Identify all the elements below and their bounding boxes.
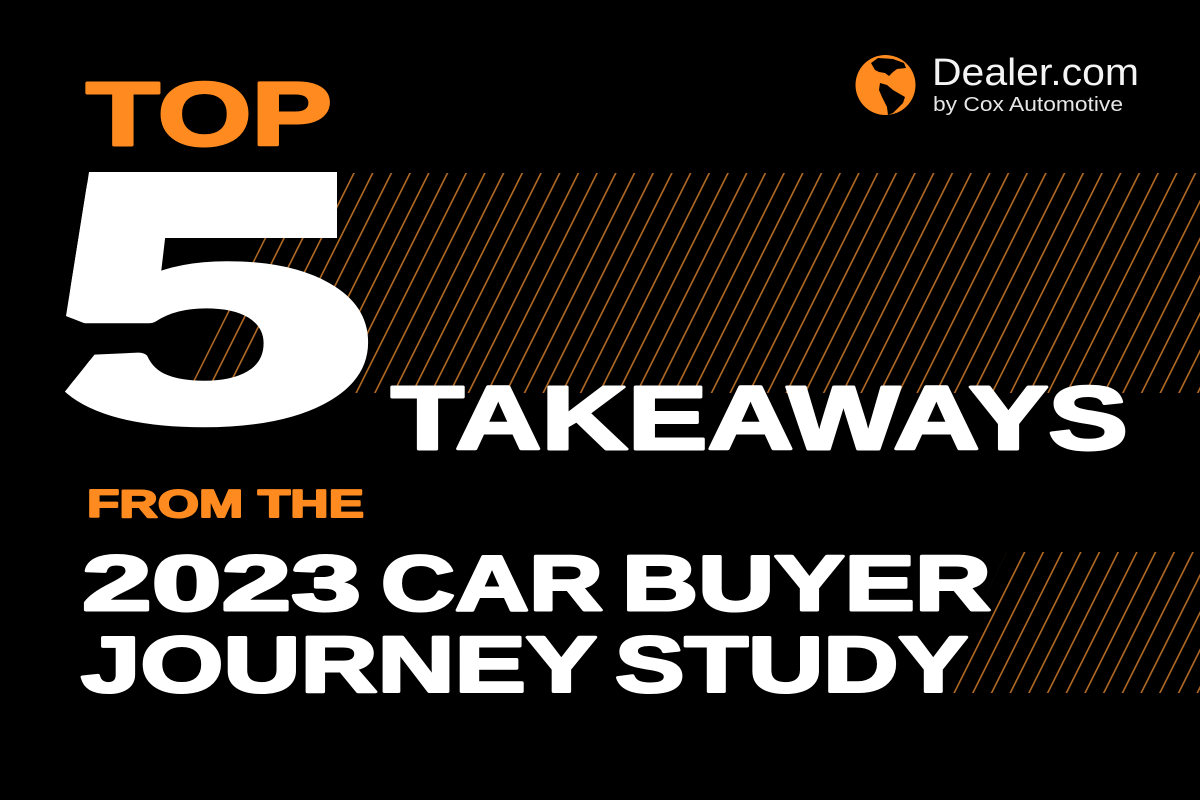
tagline: by Cox Automotive: by Cox Automotive bbox=[933, 93, 1123, 116]
title line: JOURNEY STUDY bbox=[81, 620, 968, 708]
title line: 2023 CAR BUYER: CAR bbox=[381, 539, 603, 627]
subheading: FROM THE: FROM THE bbox=[87, 483, 364, 526]
title line: 2023 CAR BUYER bbox=[82, 539, 991, 627]
heading: TOP: TOP bbox=[86, 65, 332, 165]
title line: 2023 CAR BUYER: 2023 bbox=[82, 539, 361, 627]
numeral: 5: 5 bbox=[36, 116, 376, 490]
hatched band: lower bbox=[937, 552, 1200, 693]
logo: Dealer.com by Cox Automotive bbox=[856, 52, 1139, 116]
title line: JOURNEY STUDY: JOURNEY bbox=[81, 620, 597, 708]
numeral: 5 bbox=[64, 172, 368, 428]
title line: JOURNEY STUDY: STUDY bbox=[615, 620, 968, 708]
wordmark: Dealer.com: Dealer.com bbox=[932, 52, 1139, 94]
heading: TAKEAWAYS: TAKEAWAYS bbox=[391, 369, 1128, 469]
hatched band: upper bbox=[187, 173, 1200, 393]
title line: 2023 CAR BUYER: BUYER bbox=[622, 539, 991, 627]
icon: globe bbox=[856, 55, 916, 115]
